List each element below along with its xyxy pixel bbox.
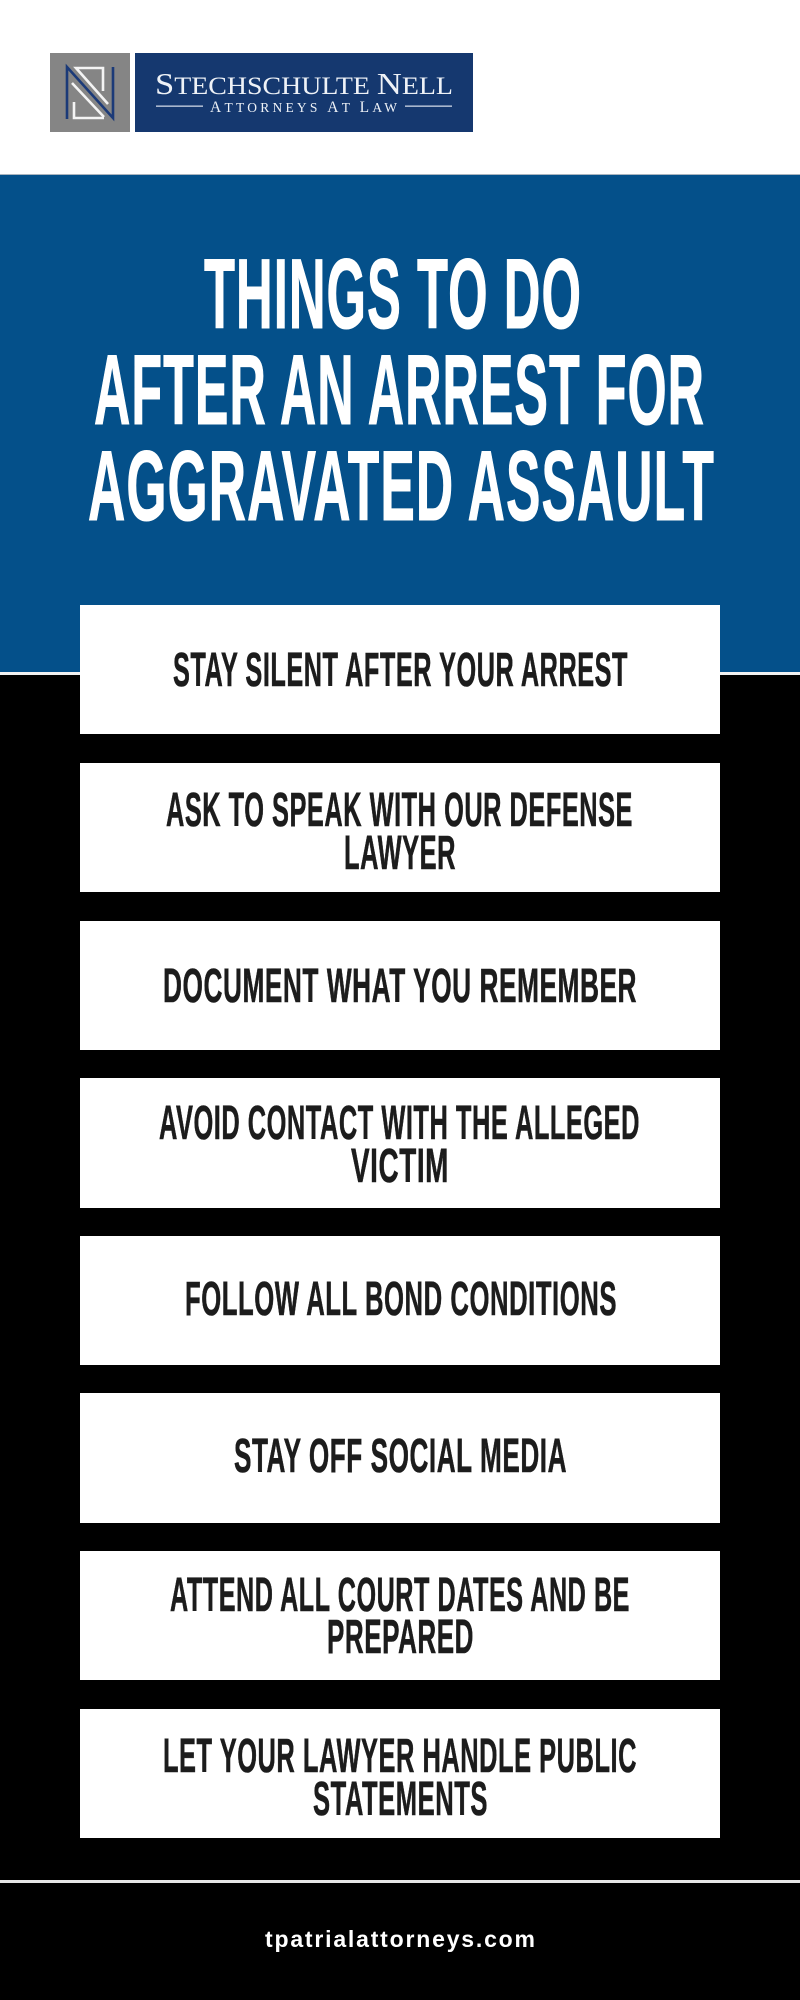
logo mark: gray square with NS monogram	[50, 53, 130, 132]
page header background	[0, 0, 800, 174]
logo wordmark panel: ATTORNEYS AT LAW	[210, 99, 397, 116]
card 5: bond conditions	[80, 1236, 720, 1365]
card 4: avoid contact: VICTIM	[351, 1140, 449, 1193]
title	[88, 238, 715, 541]
card 6: social media	[80, 1393, 720, 1523]
lower black background with white rule	[0, 672, 800, 675]
blue title band	[0, 175, 800, 672]
card 4: avoid contact	[80, 1078, 720, 1208]
footer rule	[0, 1880, 800, 1883]
logo	[50, 53, 473, 132]
logo wordmark panel: STECHSCHULTE NELL	[155, 66, 453, 101]
card 8: public statements: STATEMENTS	[313, 1773, 488, 1826]
card 2: ask to speak	[80, 763, 720, 892]
card 3: document	[80, 921, 720, 1050]
card 7: court dates: PREPARED	[327, 1611, 474, 1664]
footer website: tpatrialattorneys.com	[265, 1926, 535, 1952]
card 8: public statements	[80, 1709, 720, 1838]
card 7: court dates	[80, 1551, 720, 1680]
card 1: stay silent	[80, 605, 720, 734]
logo wordmark panel	[135, 53, 473, 132]
card 2: ask to speak: LAWYER	[344, 827, 456, 880]
